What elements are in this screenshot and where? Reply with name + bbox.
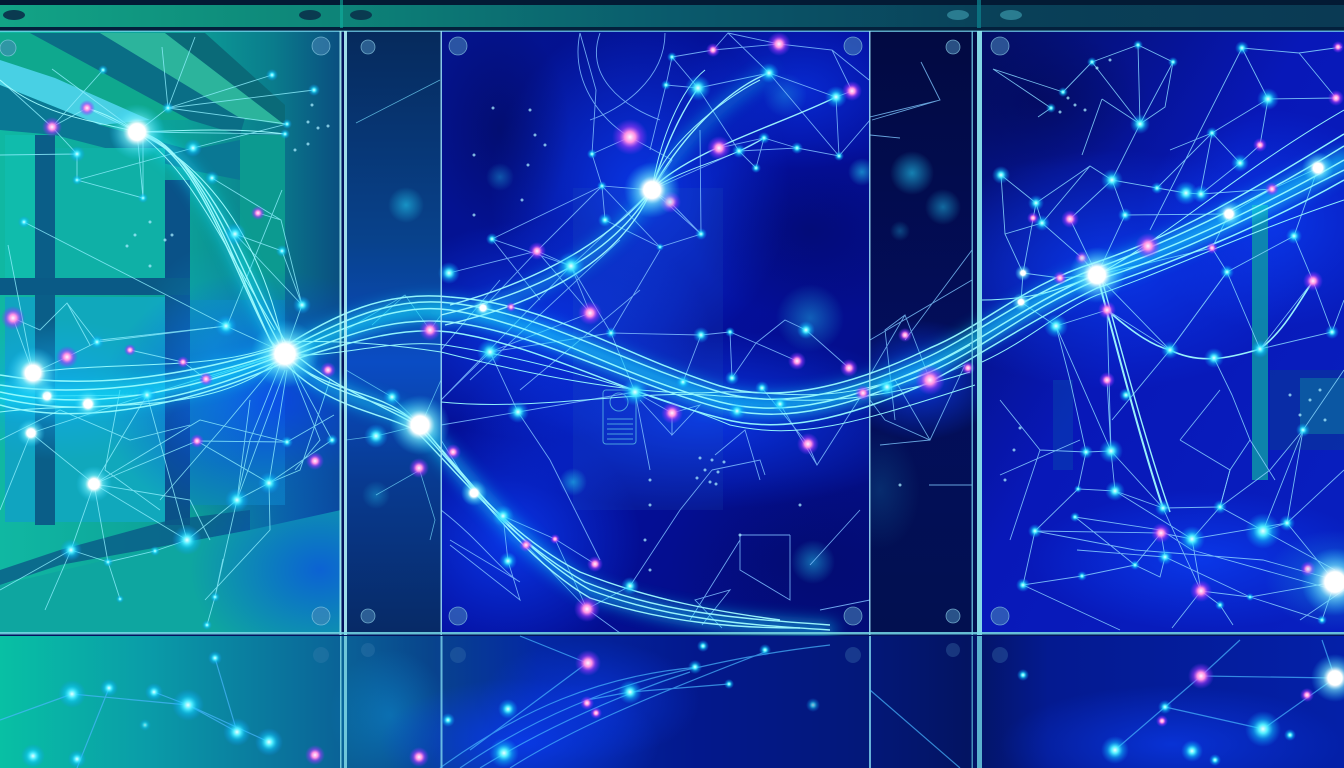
glass panel edges [0, 30, 1344, 635]
reflective floor [0, 636, 1344, 768]
light wave: rising strands centre [441, 70, 836, 325]
mesh network lines: right panel top [993, 45, 1344, 531]
panel: right divider [870, 32, 977, 632]
panel: left divider [346, 31, 441, 633]
panel: centre glass [441, 31, 870, 633]
glow nodes: cyan [17, 40, 1339, 630]
faint document card [573, 188, 723, 510]
panel: left glass with room behind [0, 31, 341, 633]
mesh network lines: centre panel [441, 33, 870, 633]
stippled dot clusters [126, 58, 1326, 572]
glow nodes: bright white hubs [7, 104, 1344, 616]
mesh network lines: right panel bottom [1000, 390, 1344, 630]
top frame bar [0, 0, 1344, 32]
glow nodes: magenta [1, 32, 1344, 622]
light wave: descending strands [0, 80, 1313, 630]
light wave: main strands [0, 110, 1344, 431]
panel: right glass [981, 31, 1344, 633]
panel bolts [0, 37, 1009, 625]
mesh network lines: left divider [346, 80, 441, 540]
mesh network lines: left panel [0, 37, 334, 625]
mesh network lines: right divider [870, 62, 972, 485]
light wave glow [0, 73, 1344, 630]
